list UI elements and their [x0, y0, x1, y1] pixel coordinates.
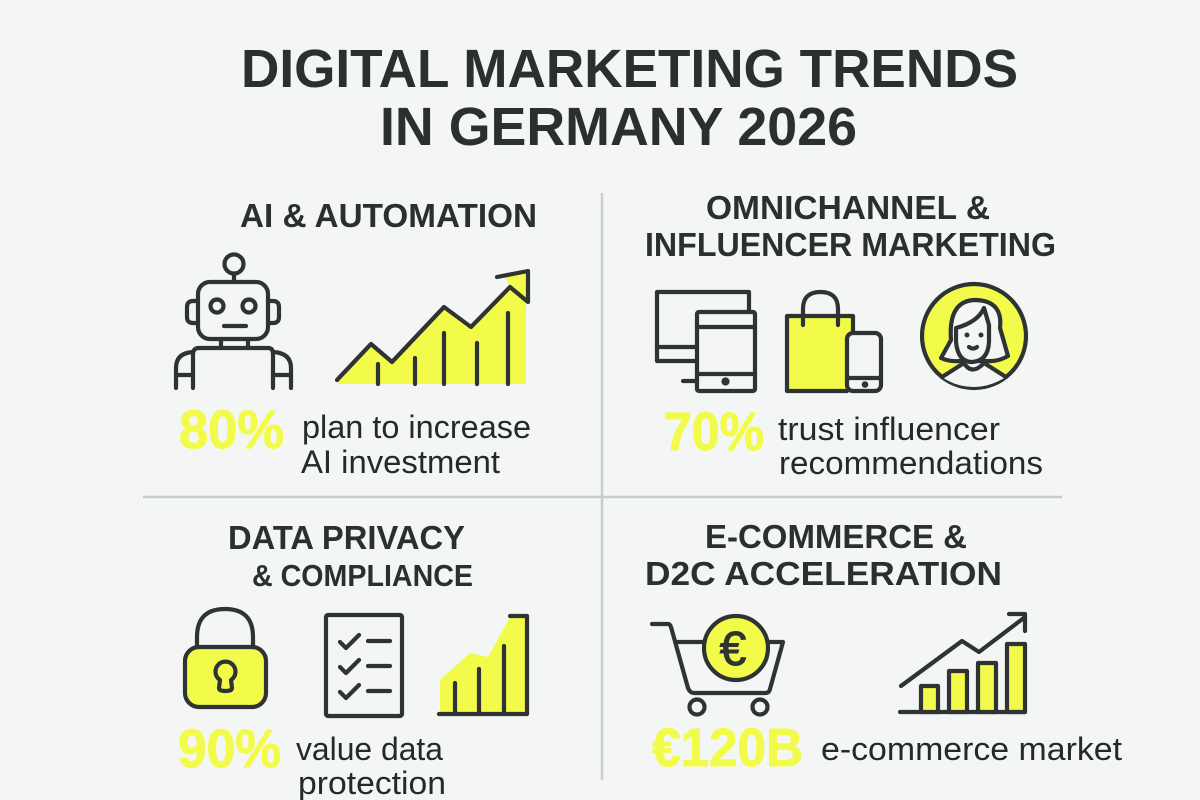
chart: compliance growth	[439, 616, 527, 714]
icon: influencer portrait	[922, 284, 1026, 388]
heading: data privacy: DATA PRIVACY	[228, 519, 465, 556]
icon: padlock	[185, 609, 266, 707]
icon: shopping cart with euro coin: €	[720, 623, 747, 676]
heading: omnichannel: INFLUENCER MARKETING	[645, 226, 1056, 263]
label: value data protection: protection	[298, 765, 446, 800]
title: IN GERMANY 2026	[380, 97, 857, 157]
heading: e-commerce: E-COMMERCE &	[705, 518, 967, 555]
icon: monitor and tablet	[657, 292, 755, 391]
label: trust influencer recommendations: recommendations	[779, 445, 1043, 481]
panel: omnichannel & influencer marketing	[645, 189, 1056, 481]
stat: 80%: 80%	[179, 400, 284, 460]
heading: e-commerce	[645, 518, 1002, 592]
heading: omnichannel	[645, 189, 1056, 263]
heading: omnichannel: OMNICHANNEL &	[706, 189, 990, 226]
label: plan to increase AI investment: plan to increase	[302, 409, 531, 445]
title	[241, 39, 1018, 157]
panel: data privacy & compliance	[178, 519, 527, 800]
chart: rising area with bars	[337, 271, 528, 384]
panel: e-commerce & D2C acceleration	[645, 518, 1122, 778]
icon: shopping bag and phone	[787, 292, 881, 391]
label: trust influencer recommendations: trust influencer	[778, 411, 1000, 447]
heading: e-commerce: D2C ACCELERATION	[645, 555, 1002, 592]
panel: AI & automation	[176, 197, 537, 480]
heading: data privacy: & COMPLIANCE	[252, 558, 473, 593]
label: value data protection	[296, 731, 446, 800]
stat: 90%: 90%	[178, 719, 281, 779]
stat: €120B: €120B	[652, 718, 803, 778]
icon: checklist	[326, 615, 402, 716]
title: DIGITAL MARKETING TRENDS	[241, 39, 1018, 99]
label: plan to increase AI investment	[301, 409, 531, 480]
heading: AI & automation: AI & AUTOMATION	[240, 197, 537, 234]
stat: 70%: 70%	[664, 402, 764, 462]
label: value data protection: value data	[296, 731, 443, 767]
label: plan to increase AI investment: AI investment	[301, 444, 500, 480]
icon: robot	[176, 254, 291, 388]
label: trust influencer recommendations	[778, 411, 1043, 481]
heading: data privacy	[228, 519, 473, 593]
icon: shopping cart with euro coin	[652, 616, 783, 714]
chart: growth bars with arrow	[900, 614, 1025, 712]
label: e-commerce market: e-commerce market	[821, 731, 1122, 767]
